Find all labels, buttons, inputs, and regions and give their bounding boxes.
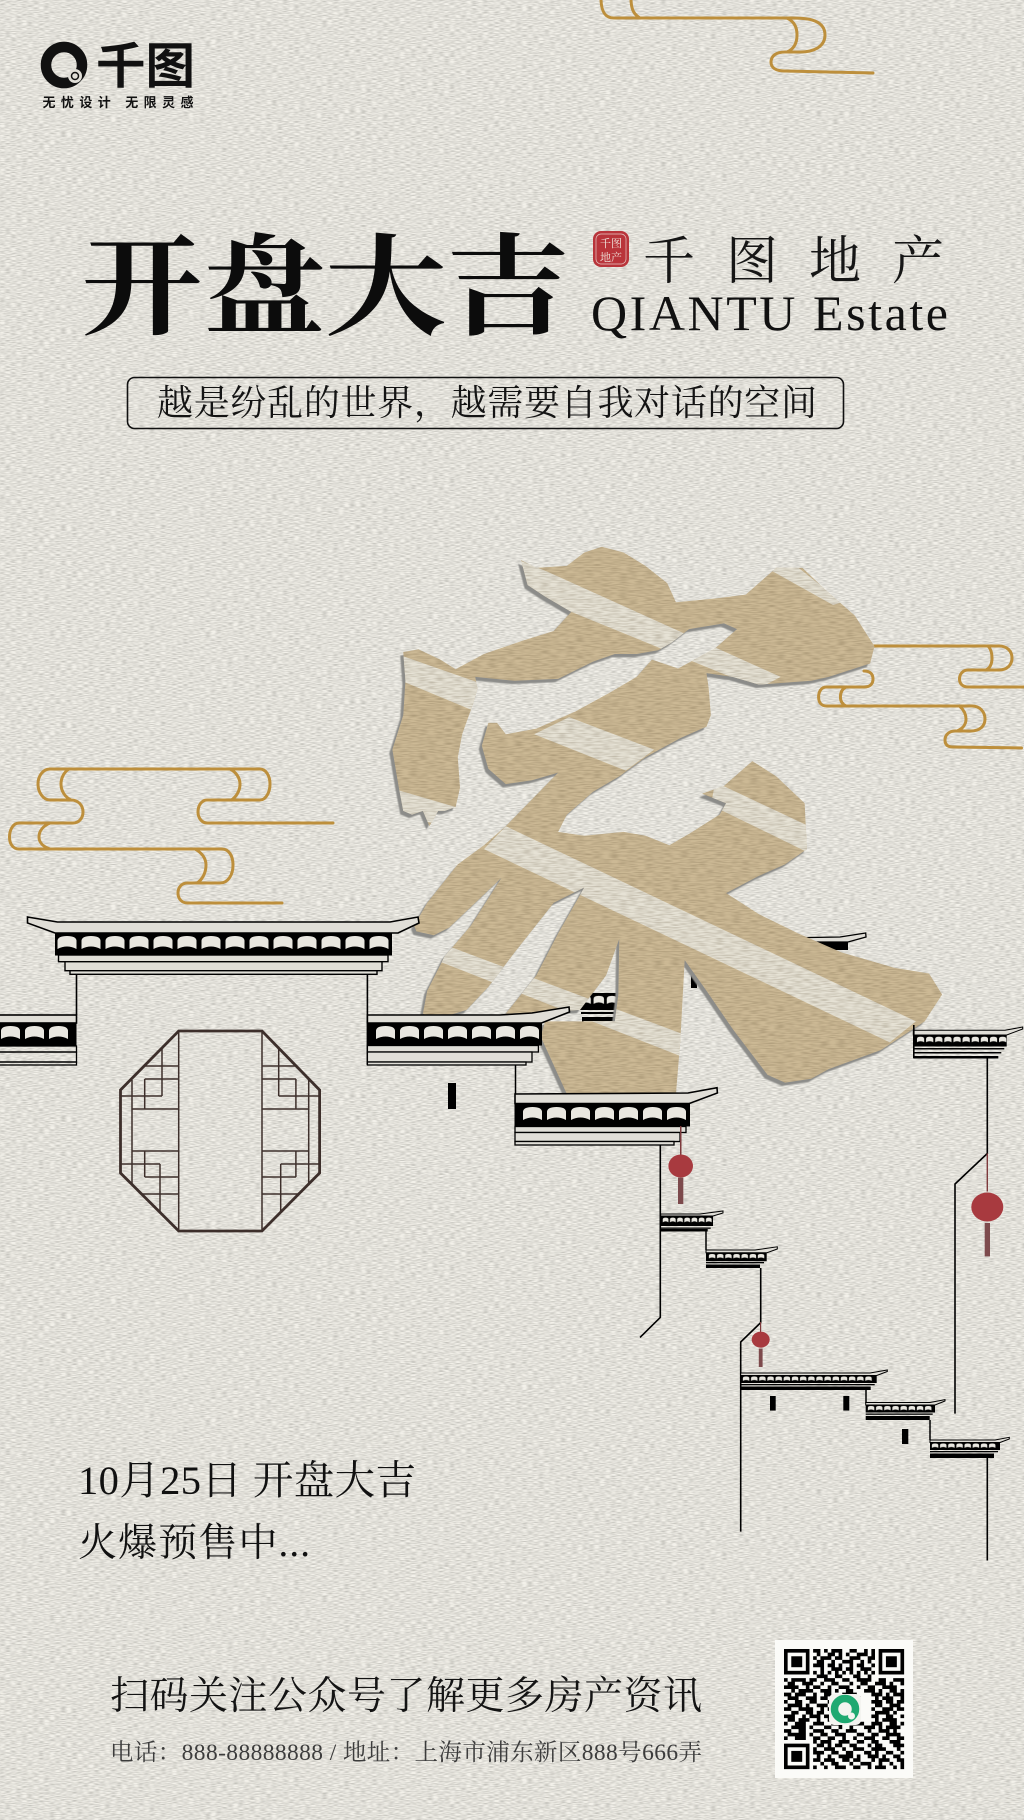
slogan text: 越是纷乱的世界，越需要自我对话的空间 <box>157 375 817 426</box>
QR center logo <box>829 1694 861 1725</box>
building: small in gap <box>578 993 620 1031</box>
gate walls <box>76 974 367 1065</box>
window: small behind character <box>691 970 697 988</box>
title: 开盘大吉: 开盘大吉 <box>81 200 569 358</box>
lantern 1 <box>668 1126 693 1204</box>
icon: logo ring <box>46 47 82 83</box>
seal: 千图地产: 地产 <box>600 249 622 265</box>
slogan box <box>128 375 844 428</box>
cloud: right <box>819 646 1024 748</box>
building: step 3 <box>866 1400 945 1444</box>
brand name latin: QIANTU Estate <box>591 285 948 341</box>
lattice window <box>120 1031 320 1231</box>
building: left stub <box>0 1015 76 1065</box>
building: long <box>741 1370 887 1411</box>
date text: 10月25日 开盘大吉 <box>78 1458 416 1503</box>
building: right of gate <box>367 1007 570 1094</box>
cloud: left <box>10 769 333 903</box>
gate roof <box>28 917 419 933</box>
logo wordmark: 千图 <box>96 40 195 94</box>
logo tagline: 无忧设计 无限灵感 <box>42 95 194 110</box>
character shadow <box>389 550 939 1097</box>
scan call to action: 扫码关注公众号了解更多房产资讯 <box>110 1675 702 1718</box>
seal: 千图地产: 千图 <box>600 235 622 251</box>
gate building <box>28 917 419 1065</box>
building: step 2 <box>706 1247 777 1532</box>
building: step 1 <box>661 1211 723 1250</box>
logo: qiantu <box>42 40 195 110</box>
building: behind character, right <box>780 933 866 950</box>
building: top right <box>913 1025 1023 1414</box>
presale text: 火爆预售中... <box>78 1522 310 1565</box>
lantern 3 <box>971 1154 1003 1256</box>
lantern 2 <box>752 1322 770 1367</box>
brand name: 千图地产: 千图地产 <box>643 219 944 294</box>
cloud: top right <box>601 0 873 73</box>
QR code <box>775 1640 913 1778</box>
window: under roof <box>448 1083 456 1109</box>
seal: 千图地产 <box>593 231 629 267</box>
character fill <box>392 546 942 1093</box>
gate tile band <box>55 933 392 956</box>
character: 家 <box>388 546 942 1093</box>
window frame <box>120 1031 320 1231</box>
contact line: 电话：888-88888888 / 地址：上海市浦东新区888号666弄 <box>110 1739 702 1766</box>
QR finder patterns <box>786 1651 902 1767</box>
building: step 4 <box>930 1437 1009 1560</box>
gate lower eaves <box>58 955 388 974</box>
window lattice <box>120 1031 320 1231</box>
building: center large <box>514 1088 717 1337</box>
QR modules <box>784 1651 904 1767</box>
QR finder centers <box>791 1656 897 1762</box>
